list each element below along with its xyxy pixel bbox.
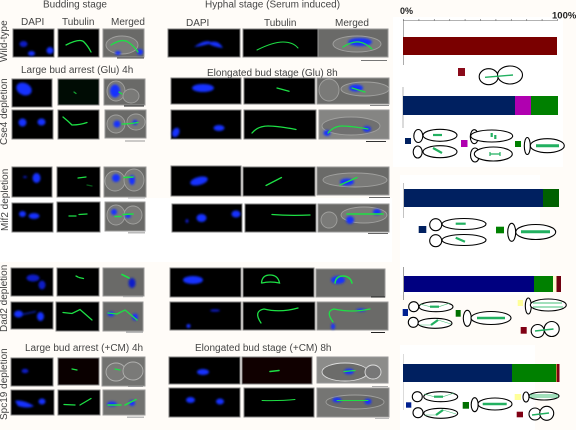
legend: Cse4 [405, 129, 564, 162]
micrographs: Spc19 row 1 hyphal [169, 357, 388, 387]
stacked bar: wild-type [403, 37, 557, 55]
column headings: budding: DAPI [21, 17, 44, 28]
subheading: elongated bud cm: Elongated bud stage (+CM) 8h [195, 343, 331, 354]
micrographs: Dad2 row 1 budding [11, 268, 144, 297]
micrographs: Mif2 row 1 hyphal [171, 166, 390, 198]
micrographs: Dad2 row 1 hyphal [170, 268, 385, 298]
column headings: budding: Merged [111, 17, 145, 28]
micrographs: Mif2 row 1 budding [12, 167, 146, 198]
stacked bar: Spc19 [403, 354, 560, 410]
legend: Mif2 [419, 218, 556, 247]
micrographs: Cse4 row 1 budding [12, 79, 145, 107]
legend: Dad2 [403, 298, 566, 338]
micrographs: Cse4 row 2 hyphal [171, 110, 389, 142]
stacked bar: Cse4 [403, 87, 558, 128]
micrographs: Dad2 row 2 hyphal [170, 302, 388, 333]
legend: Spc19 [406, 392, 559, 420]
micrographs: wild-type budding [13, 29, 144, 58]
subheading: large bud arrest cm: Large bud arrest (+CM) 4h [25, 343, 143, 354]
chart axis: 0% [400, 6, 413, 16]
column headings: hyphal [186, 18, 369, 29]
micrographs: Mif2 row 2 hyphal [172, 204, 389, 234]
micrographs: Spc19 row 2 hyphal [169, 388, 389, 419]
column headings: hyphal: DAPI [186, 18, 209, 29]
micrographs: Cse4 row 1 hyphal [171, 78, 389, 106]
column headings: budding: Tubulin [62, 17, 94, 28]
column headings: hyphal: Merged [335, 18, 369, 29]
column headings: budding [21, 17, 145, 28]
micrographs: Cse4 row 2 budding [12, 110, 146, 142]
row label: Mif2 depletion: Mif2 depletion [0, 169, 11, 231]
micrographs: Spc19 row 1 budding [11, 357, 145, 387]
legend: wild-type [458, 66, 522, 85]
stacked bar: Mif2 [404, 183, 559, 218]
chart axis [400, 6, 576, 65]
micrographs: Dad2 row 2 budding [11, 302, 143, 333]
stacked bar: Dad2 [404, 267, 561, 300]
column headings: hyphal: Tubulin [264, 18, 296, 29]
micrographs: Mif2 row 2 budding [12, 202, 145, 234]
chart axis: 100% [552, 10, 576, 22]
micrographs: wild-type hyphal [168, 29, 388, 61]
subheading: large bud arrest glu: Large bud arrest (Glu) 4h [21, 65, 133, 76]
micrographs: Spc19 row 2 budding [11, 390, 145, 418]
subheading: elongated bud glu: Elongated bud stage (Glu) 8h [207, 68, 338, 79]
